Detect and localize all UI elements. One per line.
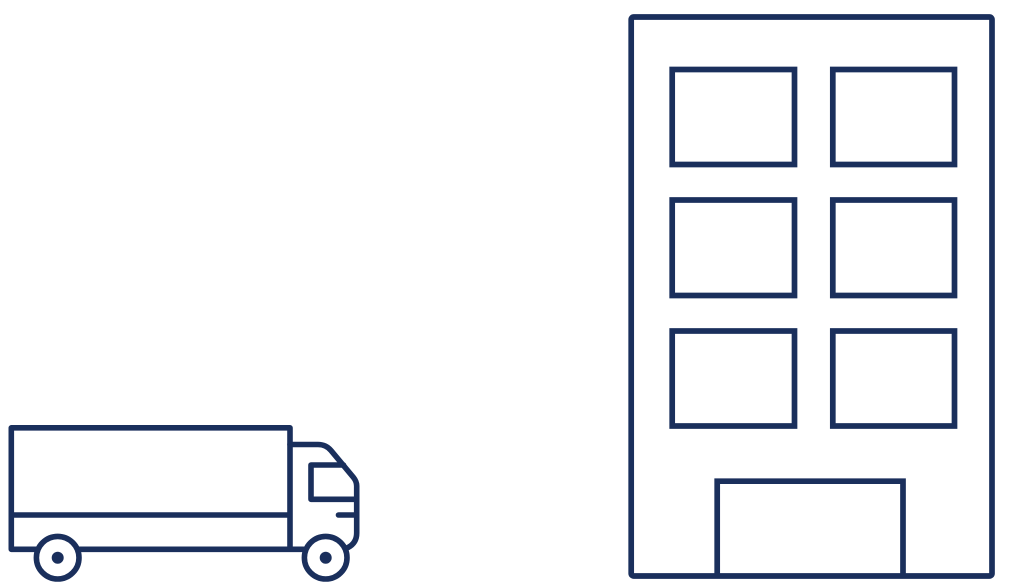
window row 3 left xyxy=(672,331,794,426)
window row 1 left xyxy=(672,70,794,164)
truck door handle xyxy=(338,512,357,518)
window row 2 left xyxy=(672,200,794,296)
truck cab xyxy=(290,444,357,548)
truck rear wheel xyxy=(36,536,79,579)
window row 1 right xyxy=(833,70,954,164)
window row 2 right xyxy=(833,200,954,296)
truck cargo box xyxy=(11,428,304,549)
icon: office building xyxy=(631,17,992,576)
building door xyxy=(717,481,903,576)
building outline xyxy=(631,17,992,576)
icon: delivery truck xyxy=(11,428,357,579)
window row 3 right xyxy=(833,331,954,426)
truck front wheel xyxy=(304,536,347,579)
truck cab window xyxy=(311,465,357,499)
